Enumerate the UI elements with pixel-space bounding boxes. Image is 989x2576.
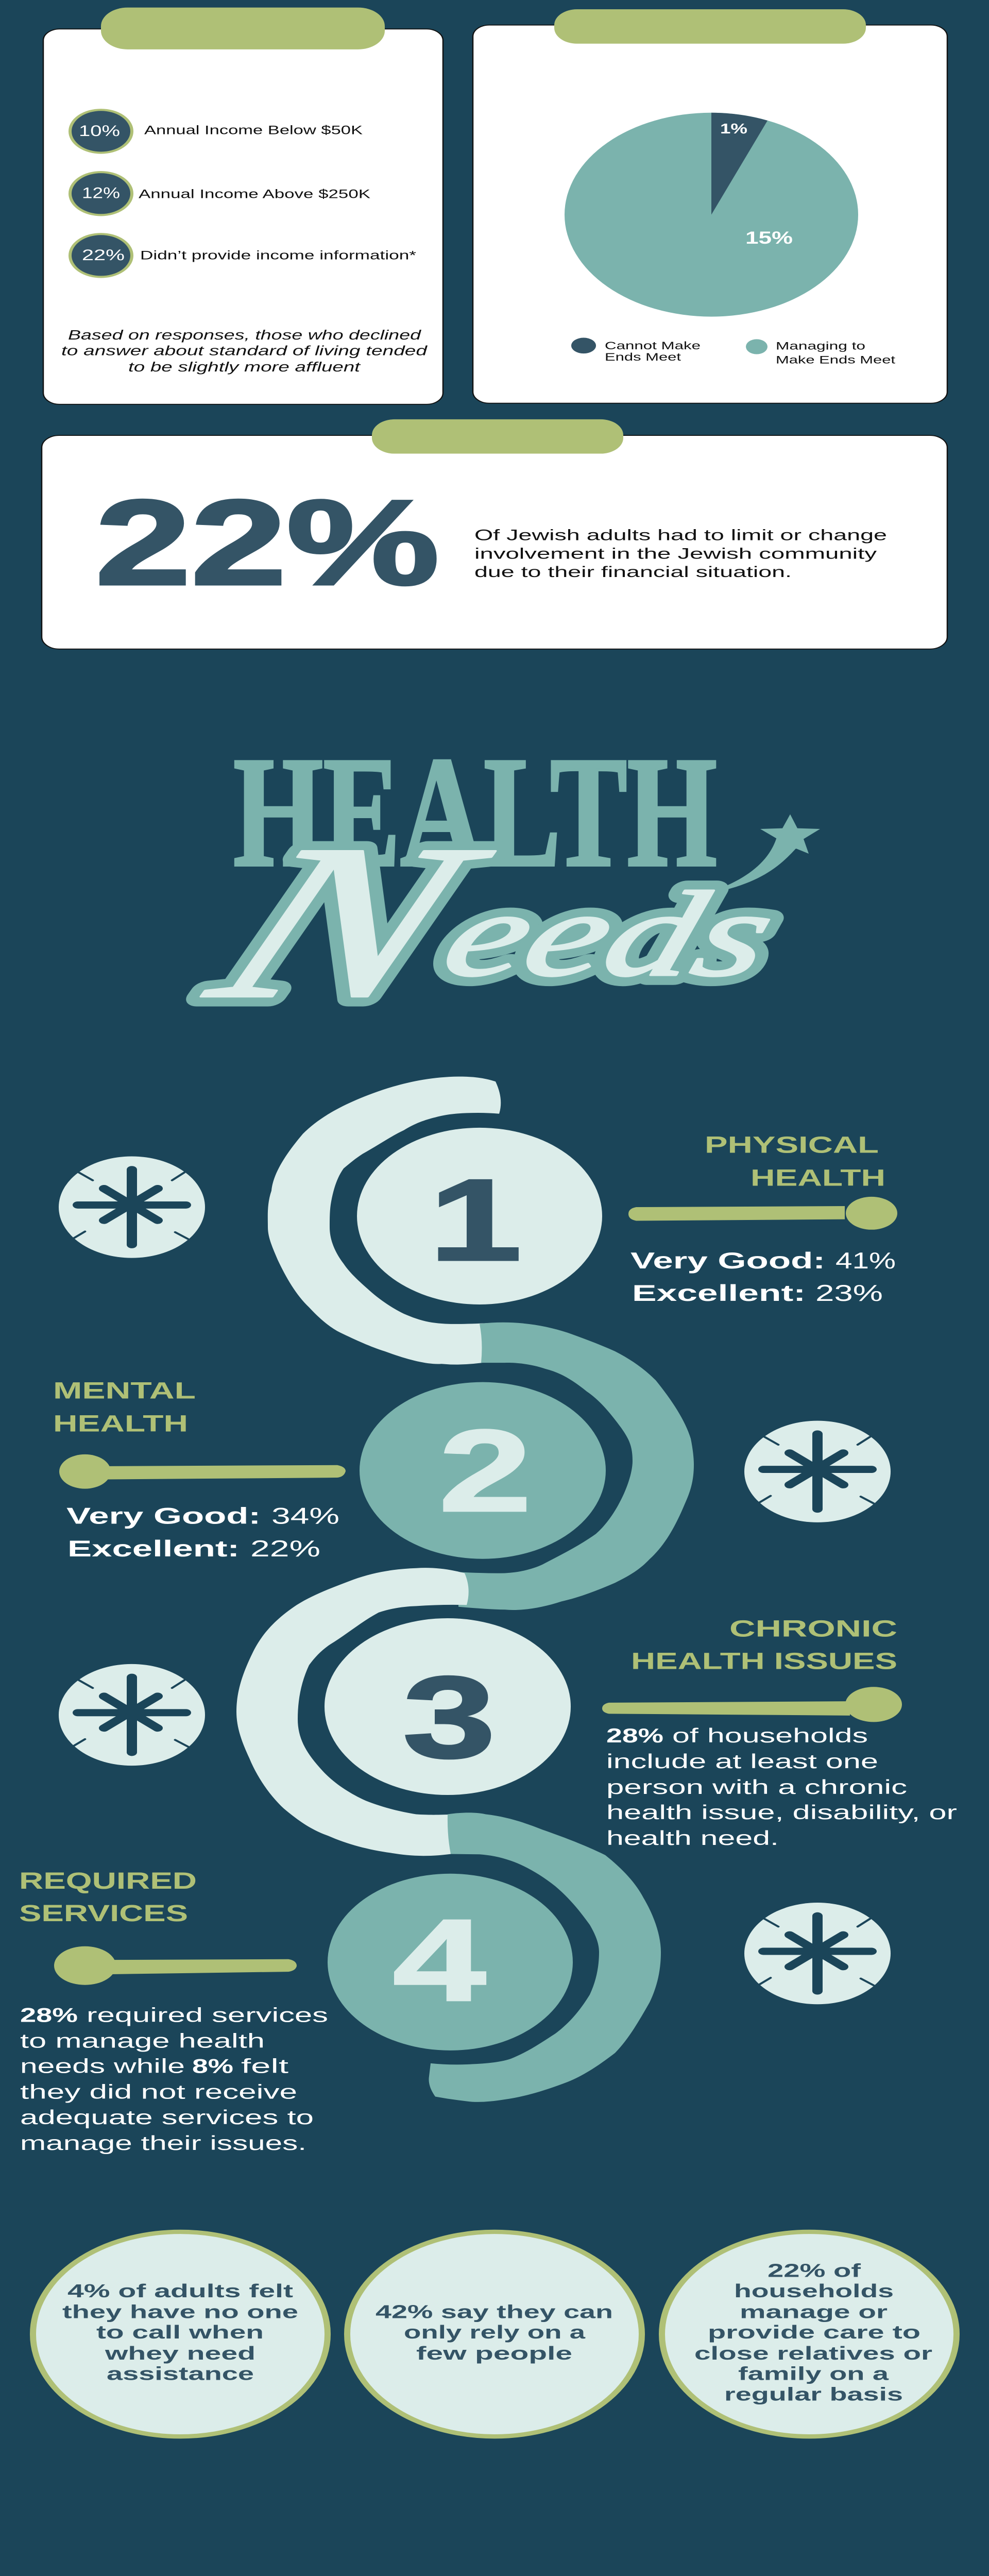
text: involvement description: involvement in the Jewish community bbox=[474, 545, 877, 562]
icon: asterisk badge 3 bbox=[59, 1664, 205, 1766]
stat: no income information bbox=[70, 234, 416, 277]
text: physical health ratings: 41% bbox=[835, 1247, 896, 1273]
heading: mental health: HEALTH bbox=[53, 1411, 188, 1437]
legend: managing to make ends meet bbox=[746, 339, 896, 366]
text: required services description: manage their issues. bbox=[20, 2132, 306, 2155]
note: income responses bbox=[61, 328, 428, 374]
icon: asterisk badge 4 bbox=[744, 1903, 891, 2004]
callout circle: care for relatives: provide care to bbox=[708, 2322, 920, 2343]
pill: pie heading tab bbox=[554, 9, 866, 44]
callout circle: care for relatives: close relatives or bbox=[694, 2343, 932, 2364]
card: income background bbox=[43, 29, 443, 404]
callout circle: few people: few people bbox=[416, 2343, 572, 2364]
callout circle: no one to call: 4% of adults felt bbox=[67, 2281, 293, 2301]
text: required services description: 8% bbox=[192, 2055, 233, 2077]
stat: no income information: Didn’t provide income information* bbox=[140, 249, 416, 262]
title: Health Needs bbox=[177, 725, 820, 1045]
icon: asterisk badge 1 bbox=[59, 1156, 205, 1258]
big number: 22 percent: 22% bbox=[95, 475, 439, 610]
text: required services description: to manage health bbox=[20, 2030, 265, 2052]
text: required services description: they did not receive bbox=[20, 2081, 297, 2103]
text: required services description: felt bbox=[241, 2055, 289, 2077]
note: income responses: to answer about standard of living tended bbox=[61, 343, 428, 358]
step 2: mental health bbox=[53, 1378, 891, 1562]
icon: shooting star bbox=[724, 815, 820, 890]
text: chronic health description: person with a chronic bbox=[606, 1776, 907, 1799]
note: income responses: Based on responses, those who declined bbox=[68, 328, 422, 343]
stat: income below 50K bbox=[70, 110, 363, 153]
text: chronic health description: health need. bbox=[606, 1827, 779, 1850]
callout circle: care for relatives: households bbox=[734, 2281, 894, 2301]
heading: mental health: MENTAL bbox=[53, 1378, 196, 1404]
card: callout background bbox=[42, 435, 947, 649]
heading: chronic health issues: HEALTH ISSUES bbox=[631, 1648, 897, 1674]
number circle 4: 4 bbox=[393, 1895, 487, 2025]
number circle 3: 3 bbox=[403, 1653, 496, 1783]
text: required services description: 28% bbox=[20, 2004, 78, 2026]
legend: managing to make ends meet: Managing to bbox=[776, 340, 865, 352]
pie chart bbox=[565, 113, 858, 317]
pie chart: 1% bbox=[720, 121, 747, 137]
pointer: mental health bbox=[59, 1454, 346, 1489]
legend: cannot make ends meet: Cannot Make bbox=[605, 339, 701, 352]
number circle 2 bbox=[360, 1382, 606, 1559]
heading: chronic health issues bbox=[631, 1616, 897, 1674]
stat: income above 250K bbox=[70, 172, 371, 215]
connector arc 4 bbox=[429, 1812, 661, 2102]
text: involvement description bbox=[474, 526, 887, 581]
panel: income bbox=[43, 8, 443, 404]
stat: income above 250K: 12% bbox=[82, 184, 120, 201]
number circle 1 bbox=[357, 1128, 602, 1304]
heading: required services bbox=[19, 1868, 197, 1927]
number circle 4 bbox=[328, 1874, 573, 2050]
text: physical health ratings: Very Good: bbox=[630, 1247, 825, 1273]
legend: cannot make ends meet bbox=[571, 338, 701, 363]
heading: physical health bbox=[705, 1132, 885, 1191]
text: chronic health description: health issue, disability, or bbox=[606, 1802, 957, 1824]
panel: making ends meet bbox=[473, 9, 947, 403]
number circle 2: 2 bbox=[439, 1406, 532, 1536]
heading: physical health: HEALTH bbox=[751, 1165, 885, 1191]
stat: income below 50K: 10% bbox=[79, 122, 120, 139]
callout circle: care for relatives: 22% of bbox=[768, 2260, 861, 2281]
text: required services description: needs while bbox=[20, 2055, 185, 2077]
text: mental health ratings: 22% bbox=[250, 1536, 320, 1562]
text: required services description bbox=[20, 2004, 328, 2155]
heading: chronic health issues: CHRONIC bbox=[729, 1616, 897, 1642]
callout circle: care for relatives: regular basis bbox=[724, 2384, 903, 2405]
stat: income above 250K: Annual Income Above $250K bbox=[139, 188, 371, 201]
step 3: chronic health issues bbox=[59, 1616, 957, 1850]
callout circle: few people: only rely on a bbox=[404, 2322, 586, 2343]
text: involvement description: due to their financial situation. bbox=[474, 563, 792, 581]
step 4: required services bbox=[19, 1868, 891, 2155]
text: physical health ratings: 23% bbox=[815, 1280, 883, 1306]
connector arc 3 bbox=[236, 1568, 469, 1856]
callout circle: care for relatives: family on a bbox=[738, 2363, 889, 2384]
title word outline: Needs bbox=[177, 799, 790, 1045]
text: mental health ratings: 34% bbox=[271, 1503, 339, 1529]
text: required services description: required services bbox=[87, 2004, 328, 2026]
pill: callout heading tab bbox=[372, 419, 623, 454]
text: chronic health description: include at least one bbox=[606, 1750, 878, 1773]
number circle 1: 1 bbox=[429, 1156, 522, 1285]
legend: cannot make ends meet: Ends Meet bbox=[605, 351, 681, 363]
note: income responses: to be slightly more affluent bbox=[128, 359, 361, 374]
pill: income heading tab bbox=[101, 8, 385, 49]
panel: limited involvement bbox=[42, 419, 947, 649]
heading: mental health bbox=[53, 1378, 196, 1437]
pointer: chronic health issues bbox=[602, 1687, 902, 1722]
connector arc 1 bbox=[268, 1077, 501, 1365]
stat: income below 50K: Annual Income Below $50K bbox=[144, 124, 363, 137]
heading: required services: SERVICES bbox=[19, 1901, 188, 1927]
heading: physical health: PHYSICAL bbox=[705, 1132, 879, 1158]
callout circle: few people: 42% say they can bbox=[376, 2301, 613, 2322]
callout circle: no one to call: to call when bbox=[96, 2322, 264, 2343]
text: involvement description: Of Jewish adults had to limit or change bbox=[474, 526, 887, 544]
text: chronic health description: of households bbox=[672, 1724, 868, 1747]
callout circle: care for relatives bbox=[662, 2232, 957, 2436]
callout circle: no one to call: assistance bbox=[107, 2363, 254, 2384]
text: chronic health description: 28% bbox=[606, 1724, 663, 1747]
title word: Needs: N bbox=[177, 799, 520, 1045]
text: required services description: adequate services to bbox=[20, 2106, 314, 2129]
title word: Needs: eeds bbox=[430, 867, 790, 1002]
number circle 3 bbox=[325, 1618, 571, 1795]
callout circle: no one to call: whey need bbox=[105, 2343, 255, 2364]
callout circle: care for relatives: manage or bbox=[740, 2301, 888, 2322]
card: pie background bbox=[473, 25, 947, 403]
text: physical health ratings bbox=[630, 1247, 896, 1306]
pointer: physical health bbox=[628, 1197, 897, 1230]
connector arc 2 bbox=[458, 1323, 694, 1610]
legend: managing to make ends meet: Make Ends Meet bbox=[776, 353, 896, 366]
pie chart: 15% bbox=[745, 228, 793, 248]
callout circle: no one to call: they have no one bbox=[62, 2301, 298, 2322]
title word outline: Needs: N bbox=[177, 799, 520, 1045]
text: mental health ratings: Excellent: bbox=[67, 1536, 240, 1562]
text: chronic health description bbox=[606, 1724, 957, 1850]
text: mental health ratings bbox=[66, 1503, 339, 1562]
title word: Needs bbox=[177, 799, 790, 1045]
step 1: physical health bbox=[59, 1128, 897, 1306]
icon: asterisk badge 2 bbox=[744, 1421, 891, 1522]
callout circle: few people bbox=[347, 2232, 642, 2436]
text: physical health ratings: Excellent: bbox=[632, 1280, 806, 1306]
title word outline: Needs: eeds bbox=[430, 867, 790, 1002]
stat: no income information: 22% bbox=[82, 246, 125, 263]
heading: required services: REQUIRED bbox=[19, 1868, 197, 1894]
pointer: required services bbox=[54, 1946, 297, 1985]
text: mental health ratings: Very Good: bbox=[66, 1503, 261, 1529]
callout circle: no one to call bbox=[33, 2232, 328, 2436]
